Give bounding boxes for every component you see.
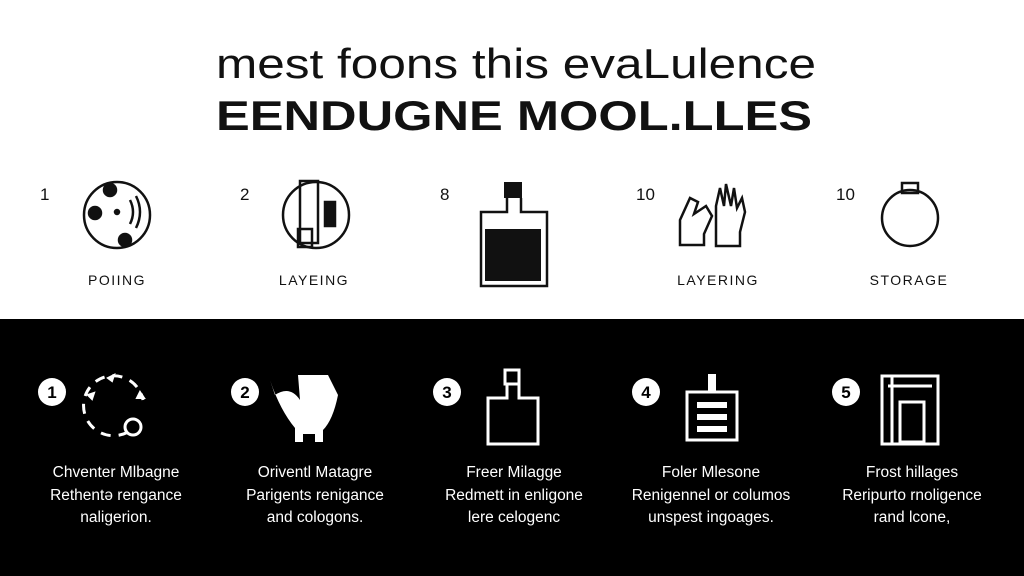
- step 5: Frost hillages: [866, 464, 958, 481]
- step 4: 4: [641, 383, 651, 402]
- item 4 hands: 10: [636, 185, 655, 204]
- step 1: naligerion.: [80, 509, 152, 526]
- item 2 layeing: 2: [240, 185, 249, 204]
- title: [216, 40, 816, 139]
- item 4 hands: LAYERING: [677, 272, 759, 288]
- step 5: rand lcone,: [874, 509, 950, 526]
- item 1 poiing: 1: [40, 185, 49, 204]
- step 2: [231, 375, 384, 526]
- bottom panel: [0, 319, 1024, 576]
- item 2 layeing: LAYEING: [279, 272, 349, 288]
- item 4 hands: [636, 184, 759, 288]
- step 5: Reripurto rnoligence: [842, 487, 982, 504]
- item 5 storage: STORAGE: [870, 272, 948, 288]
- step 1: [38, 375, 182, 526]
- title: mest foons this evaLulence: [216, 40, 816, 87]
- step 5: 5: [841, 383, 851, 402]
- top row: [40, 181, 948, 288]
- item 2 layeing: [240, 181, 349, 288]
- item 1 poiing: POIING: [88, 272, 146, 288]
- step 1: Rethentə rengance: [50, 487, 182, 504]
- item 3 bottle: [440, 182, 547, 286]
- item 5 storage: 10: [836, 185, 855, 204]
- step 4: unspest ingoages.: [648, 509, 774, 526]
- item 1 poiing: [40, 182, 150, 288]
- step 2: Oriventl Matagre: [258, 464, 372, 481]
- step 1: 1: [47, 383, 57, 402]
- item 3 bottle: 8: [440, 185, 449, 204]
- step 3: Redmett in enligone: [445, 487, 583, 504]
- step 1: Chventer Mlbagne: [53, 464, 179, 481]
- step 3: Freer Milagge: [466, 464, 562, 481]
- title: EENDUGNE MOOL.LLES: [216, 92, 812, 139]
- step 3: lere celogenc: [468, 509, 560, 526]
- step 4: Foler Mlesone: [662, 464, 760, 481]
- step 4: [632, 374, 791, 526]
- step 5: [832, 376, 982, 526]
- step 2: 2: [240, 383, 250, 402]
- step 3: [433, 370, 583, 526]
- item 5 storage: [836, 183, 948, 288]
- step 3: 3: [442, 383, 452, 402]
- step 2: Parigents renigance: [246, 487, 384, 504]
- step 2: and cologons.: [267, 509, 363, 526]
- step 4: Renigennel or columos: [632, 487, 791, 504]
